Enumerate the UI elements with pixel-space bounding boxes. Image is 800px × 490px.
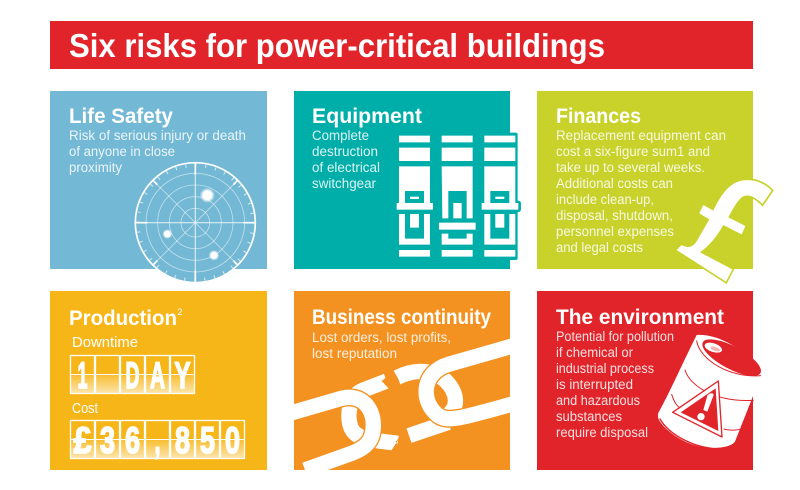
text: finances description: Additional costs can	[556, 176, 673, 191]
text: environment description: require disposal	[556, 425, 648, 440]
text: equipment description	[312, 128, 380, 191]
flip display: 1 day: A	[150, 355, 165, 396]
text: life safety description	[69, 128, 246, 175]
heading: the environment: The environment	[556, 306, 724, 329]
text: finances description	[556, 128, 726, 255]
heading: business continuity: Business continuity	[312, 306, 491, 329]
flip display: 1 day: Y	[174, 355, 191, 396]
text: finances description: cost a six-figure sum1 and	[556, 144, 710, 159]
flip display: cost: 8	[175, 420, 190, 461]
text: environment description: and hazardous	[556, 393, 640, 408]
title banner	[50, 21, 753, 69]
text: environment description	[556, 329, 674, 440]
panel: the environment	[537, 291, 766, 470]
label: downtime: Downtime	[72, 334, 138, 351]
icon: radar	[135, 163, 255, 283]
heading: life safety: Life Safety	[69, 105, 173, 128]
icon: broken chain	[278, 344, 518, 470]
icon: hazard barrel	[658, 332, 766, 449]
heading: equipment: Equipment	[312, 105, 422, 128]
flip display: cost: ,	[154, 420, 160, 461]
text: environment description: is interrupted	[556, 377, 633, 392]
flip display: cost	[70, 420, 245, 461]
text: equipment description: of electrical	[312, 160, 380, 175]
heading: production: Production	[69, 307, 177, 330]
flip display: cost: 5	[200, 420, 215, 461]
flip display: cost: £	[74, 420, 92, 461]
text: equipment description: destruction	[312, 144, 378, 159]
text: finances description: personnel expenses	[556, 224, 674, 239]
flip display: cost: 3	[100, 420, 115, 461]
heading: production: 2	[178, 307, 183, 317]
text: business continuity description: Lost orders, lost profits,	[312, 330, 451, 345]
text: life safety description: proximity	[69, 160, 122, 175]
text: finances description: Replacement equipment can	[556, 128, 726, 143]
flip display: cost: 0	[225, 420, 240, 461]
text: life safety description: Risk of serious injury or death	[69, 128, 246, 143]
text: finances description: include clean-up,	[556, 192, 654, 207]
text: environment description: Potential for pollution	[556, 329, 674, 344]
flip display: 1 day	[70, 355, 194, 396]
flip display: 1 day: 1	[78, 355, 88, 396]
text: equipment description: Complete	[312, 128, 369, 143]
panel: production	[50, 291, 267, 470]
text: finances description: take up to several weeks.	[556, 160, 705, 175]
text: business continuity description: lost reputation	[312, 346, 397, 361]
panel: life safety	[50, 91, 267, 283]
text: environment description: substances	[556, 409, 622, 424]
text: life safety description: of anyone in close	[69, 144, 175, 159]
label: cost: Cost	[72, 400, 99, 417]
flip display: 1 day: D	[126, 355, 140, 396]
text: environment description: industrial process	[556, 361, 654, 376]
flip display: cost: 6	[125, 420, 140, 461]
panel: equipment	[294, 91, 521, 269]
icon: pound sign	[677, 180, 772, 282]
panel: business continuity	[278, 291, 518, 470]
text: business continuity description	[312, 330, 451, 361]
text: finances description: disposal, shutdown,	[556, 208, 673, 223]
text: environment description: if chemical or	[556, 345, 633, 360]
heading: finances: Finances	[556, 105, 641, 128]
title banner: Six risks for power-critical buildings	[69, 27, 605, 64]
text: finances description: and legal costs	[556, 240, 643, 255]
panel: finances	[537, 91, 772, 282]
icon: switchgear	[397, 133, 521, 260]
text: equipment description: switchgear	[312, 176, 376, 191]
